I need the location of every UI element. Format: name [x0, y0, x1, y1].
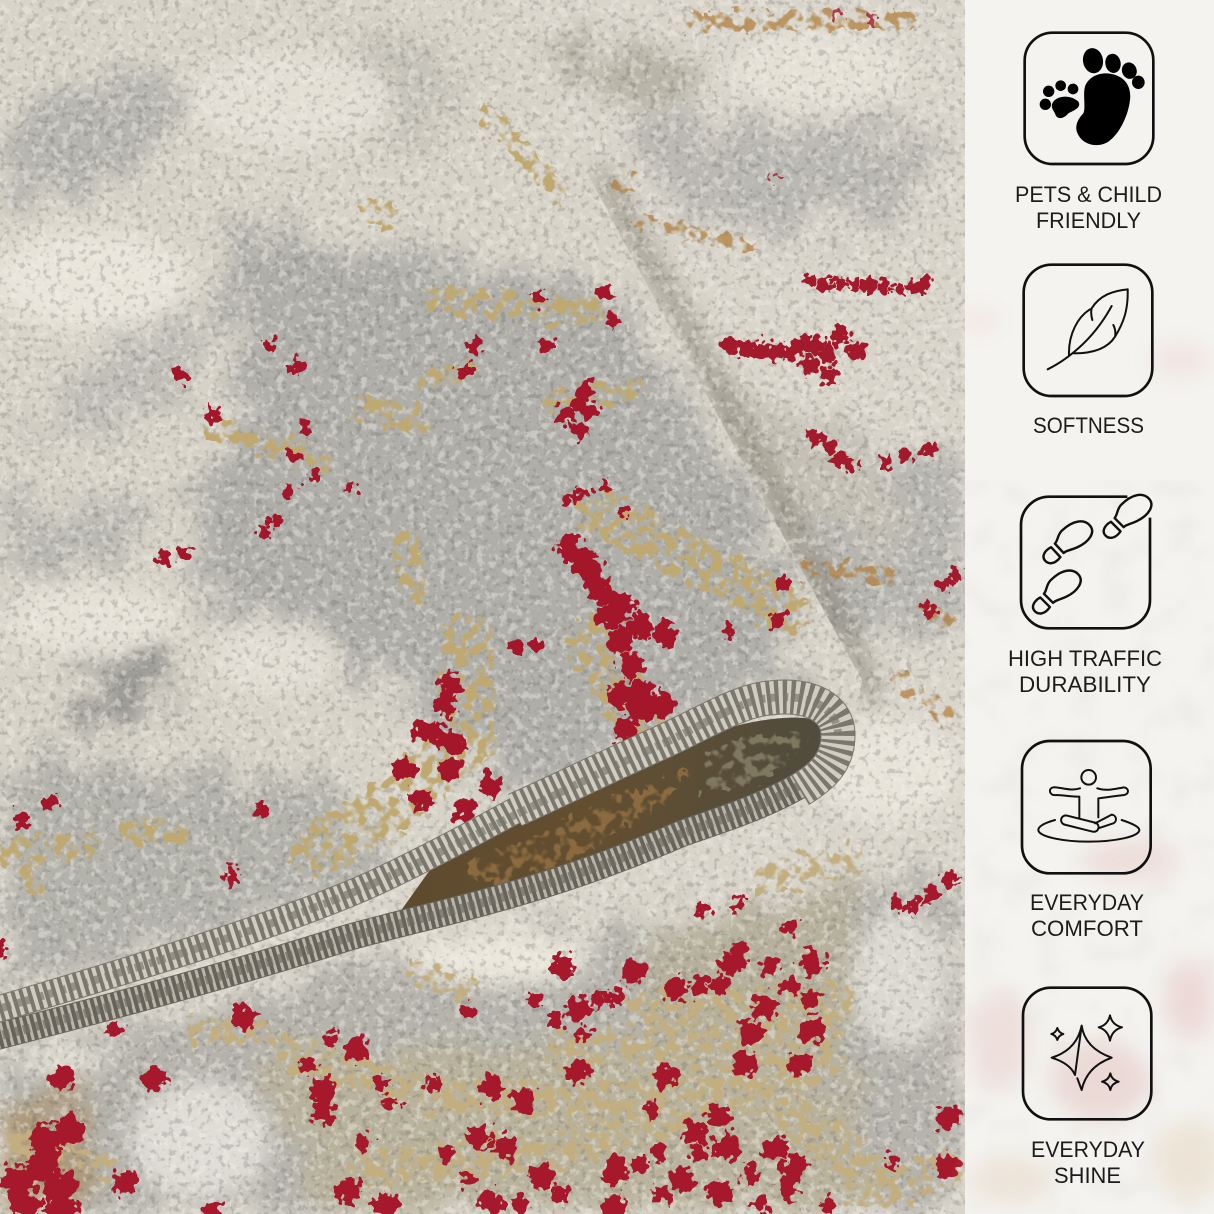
- label line two: DURABILITY: [1019, 672, 1151, 697]
- rug underside: [400, 718, 825, 912]
- label: SOFTNESS: [1033, 413, 1144, 438]
- icon: baby foot and paw print: [1025, 33, 1153, 164]
- shadow under fold: [600, 170, 875, 700]
- feature: softness: [1024, 265, 1152, 438]
- icon: sparkles: [1023, 988, 1151, 1119]
- icon: meditating figure: [1022, 741, 1151, 873]
- icon: footprints: [1021, 488, 1156, 628]
- feature: pets and child friendly: [1015, 33, 1162, 233]
- label line two: FRIENDLY: [1036, 208, 1141, 233]
- back rug motifs: [620, 15, 955, 715]
- feature: high traffic durability: [1008, 488, 1162, 697]
- bottom rug motifs: [18, 860, 950, 1210]
- folded rug surface: [0, 24, 862, 994]
- label: EVERYDAY: [1031, 1137, 1145, 1162]
- fold motifs: [0, 115, 790, 950]
- upper binding: [0, 697, 838, 1010]
- feature: everyday comfort: [1022, 741, 1151, 941]
- back rug surface: [0, 0, 965, 1214]
- label: EVERYDAY: [1030, 890, 1144, 915]
- side panel background: [962, 0, 1214, 1214]
- icon: feather: [1024, 265, 1152, 396]
- feature: everyday shine: [1023, 988, 1151, 1188]
- label: HIGH TRAFFIC: [1008, 646, 1162, 671]
- label: PETS & CHILD: [1015, 182, 1162, 207]
- carpet pile flecks: [0, 0, 965, 1214]
- lower binding: [0, 778, 812, 1037]
- rug photograph: [0, 0, 965, 1214]
- label line two: SHINE: [1054, 1163, 1121, 1188]
- label line two: COMFORT: [1031, 916, 1143, 941]
